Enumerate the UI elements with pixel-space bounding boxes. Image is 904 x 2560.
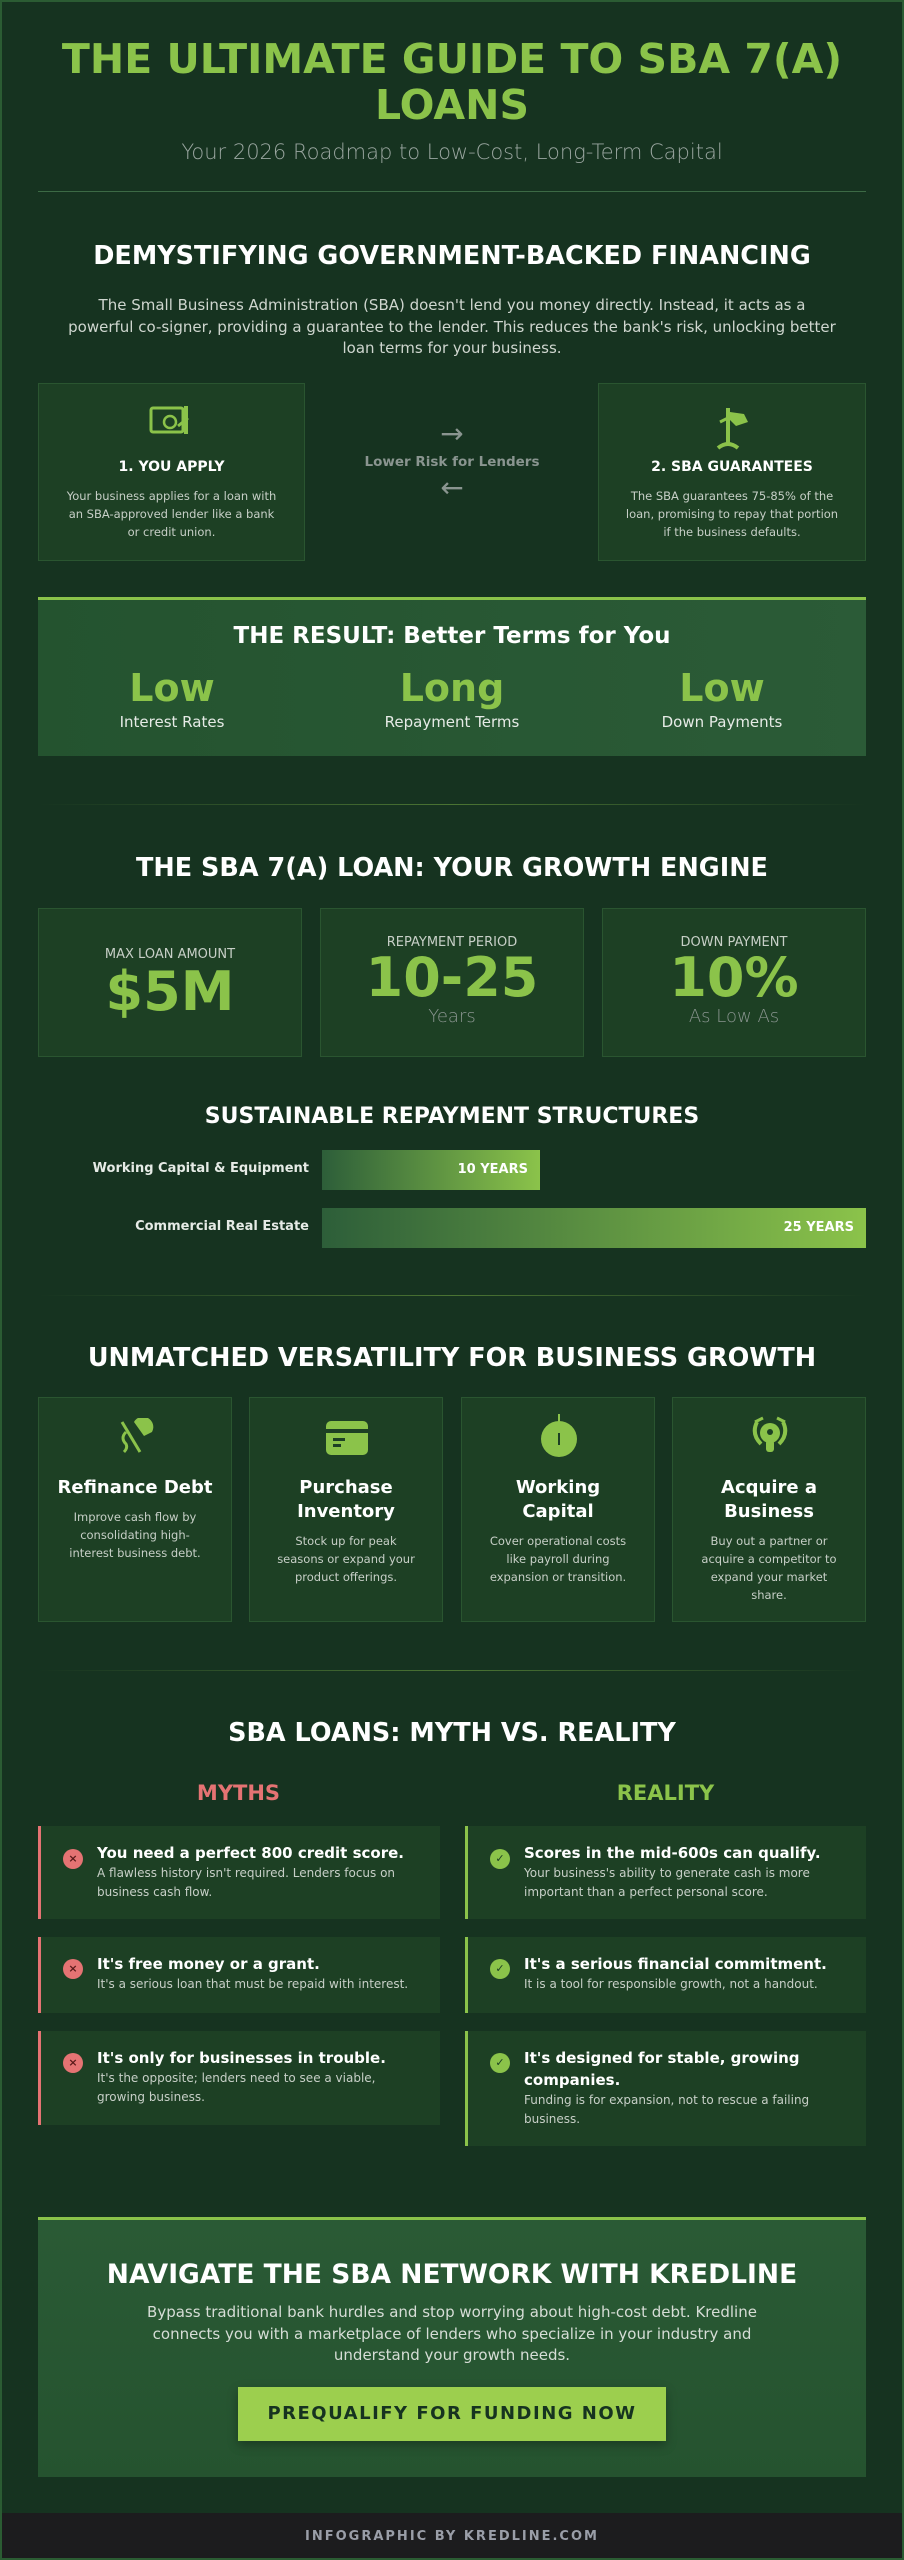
reality 1: ✓ xyxy=(495,1852,505,1865)
myth 2: × xyxy=(68,1962,78,1975)
card: working capital xyxy=(461,1397,655,1622)
reality 2 xyxy=(465,1937,866,2013)
arrows: lower risk xyxy=(364,417,540,504)
myth 1: You need a perfect 800 credit score. xyxy=(97,1844,404,1862)
text: step 2: The SBA guarantees 75-85% of the loan, promising to repay that portion if the business defaults. xyxy=(626,489,838,539)
icon: application xyxy=(150,406,189,434)
card: acquire: Business xyxy=(724,1501,814,1522)
bar: real estate xyxy=(135,1208,866,1248)
subtitle: Your 2026 Roadmap to Low-Cost, Long-Term Capital xyxy=(181,140,723,164)
heading: step 1: 1. YOU APPLY xyxy=(119,459,224,475)
bar: working capital xyxy=(93,1150,540,1190)
reality 2: It is a tool for responsible growth, not a handout. xyxy=(524,1977,818,1991)
stat: low down xyxy=(662,666,782,731)
title: LOANS xyxy=(375,81,529,129)
stat: low interest xyxy=(120,666,224,731)
intro paragraph: powerful co-signer, providing a guarantee to the lender. This reduces the bank's risk, unlocking better loan terms for your business. xyxy=(68,318,836,357)
myth 1: × xyxy=(68,1852,78,1865)
heading: result: THE RESULT: Better Terms for You xyxy=(234,623,670,649)
bar chart: repayment xyxy=(93,1150,866,1248)
reality 1: Your business's ability to generate cash is more important than a perfect personal score. xyxy=(524,1866,810,1899)
reality 3 xyxy=(465,2031,866,2146)
arrows: lower risk: Lower Risk for Lenders xyxy=(364,454,540,470)
stat card: repayment period: Years xyxy=(428,1006,476,1027)
icon: refinance xyxy=(120,1418,154,1453)
heading: versatility: UNMATCHED VERSATILITY FOR BUSINESS GROWTH xyxy=(88,1343,816,1373)
reality 2: ✓ xyxy=(495,1962,505,1975)
arrows: lower risk: → xyxy=(440,417,464,450)
stat card: down payment: 10% xyxy=(669,946,799,1009)
bar: working capital: Working Capital & Equipment xyxy=(93,1161,309,1176)
stat card: max loan: MAX LOAN AMOUNT xyxy=(105,947,235,962)
stat card: down payment: DOWN PAYMENT xyxy=(681,935,787,950)
card: inventory: Purchase xyxy=(299,1477,393,1498)
stat: long terms: Repayment Terms xyxy=(385,713,519,731)
arrows: lower risk: ← xyxy=(440,471,464,504)
heading: myths: MYTHS xyxy=(197,1781,280,1805)
stat card: max loan: $5M xyxy=(106,960,234,1023)
button: prequalify: PREQUALIFY FOR FUNDING NOW xyxy=(267,2403,637,2424)
myth 2: It's a serious loan that must be repaid with interest. xyxy=(97,1977,408,1991)
title: THE ULTIMATE GUIDE TO SBA 7(A) xyxy=(62,35,842,83)
heading: repayment structures: SUSTAINABLE REPAYMENT STRUCTURES xyxy=(205,1104,699,1129)
card: acquire xyxy=(672,1397,866,1622)
heading: step 2: 2. SBA GUARANTEES xyxy=(651,459,813,475)
card: refinance: Refinance Debt xyxy=(58,1477,212,1498)
bar: working capital: 10 YEARS xyxy=(458,1162,528,1177)
stat card: repayment period xyxy=(320,908,584,1057)
icon: flag xyxy=(716,408,748,450)
card: working capital: Cover operational costs like payroll during expansion or transition. xyxy=(490,1534,626,1584)
panel: you apply xyxy=(38,383,305,561)
card: refinance: Improve cash flow by consolidating high-interest business debt. xyxy=(69,1510,201,1560)
text: step 1: Your business applies for a loan with an SBA-approved lender like a bank or credit union. xyxy=(67,489,276,539)
stat card: down payment: As Low As xyxy=(689,1006,779,1027)
card: refinance xyxy=(38,1397,232,1622)
heading: myth vs reality: SBA LOANS: MYTH VS. REALITY xyxy=(228,1718,676,1748)
card: inventory xyxy=(249,1397,443,1622)
reality 1 xyxy=(465,1826,866,1919)
card: working capital: Working xyxy=(516,1477,600,1498)
reality 3: It's designed for stable, growing companies. xyxy=(524,2049,800,2089)
stat card: max loan xyxy=(38,908,302,1057)
myth 3: × xyxy=(68,2056,78,2069)
stat: low interest: Low xyxy=(129,666,215,710)
stat: long terms xyxy=(385,666,519,731)
myth 1: A flawless history isn't required. Lenders focus on business cash flow. xyxy=(97,1866,395,1899)
reality 1: Scores in the mid-600s can qualify. xyxy=(524,1844,821,1862)
reality 3: Funding is for expansion, not to rescue a failing business. xyxy=(524,2093,809,2126)
bar: real estate: Commercial Real Estate xyxy=(135,1219,309,1234)
stat card: down payment xyxy=(602,908,866,1057)
icon: acquire xyxy=(752,1416,788,1452)
card: working capital: Capital xyxy=(522,1501,594,1522)
reality 3: ✓ xyxy=(495,2056,505,2069)
heading: cta: NAVIGATE THE SBA NETWORK WITH KREDLINE xyxy=(107,2259,797,2290)
reality 2: It's a serious financial commitment. xyxy=(524,1955,827,1973)
heading: 7a loan: THE SBA 7(A) LOAN: YOUR GROWTH ENGINE xyxy=(136,853,768,883)
stat card: repayment period: 10-25 xyxy=(366,946,538,1009)
card: acquire: Acquire a xyxy=(721,1477,817,1498)
stat: low interest: Interest Rates xyxy=(120,713,224,731)
card: inventory: Inventory xyxy=(297,1501,395,1522)
myth 2: It's free money or a grant. xyxy=(97,1955,320,1973)
intro paragraph xyxy=(68,296,836,357)
stat card: repayment period: REPAYMENT PERIOD xyxy=(387,935,517,950)
text: cta: Bypass traditional bank hurdles and stop worrying about high-cost debt. Kredline connects you with a marketplace of lenders who specialize in your industry and understand your growth needs. xyxy=(147,2303,757,2364)
myth 3 xyxy=(38,2031,440,2125)
bar: real estate: 25 YEARS xyxy=(784,1220,854,1235)
myth 1 xyxy=(38,1826,440,1919)
panel: sba guarantees xyxy=(598,383,866,561)
title xyxy=(62,35,842,129)
heading: reality: REALITY xyxy=(617,1781,714,1805)
myth 2 xyxy=(38,1937,440,2013)
heading: demystifying: DEMYSTIFYING GOVERNMENT-BACKED FINANCING xyxy=(93,241,811,271)
footer: INFOGRAPHIC BY KREDLINE.COM xyxy=(305,2529,599,2544)
panel: the result xyxy=(38,597,866,756)
button: prequalify xyxy=(238,2387,666,2441)
footer xyxy=(0,2513,904,2560)
card: inventory: Stock up for peak seasons or expand your product offerings. xyxy=(277,1534,415,1584)
stat: low down: Low xyxy=(679,666,765,710)
myth 3: It's only for businesses in trouble. xyxy=(97,2049,386,2067)
stat: long terms: Long xyxy=(400,666,504,710)
intro paragraph: The Small Business Administration (SBA) doesn't lend you money directly. Instead, it acts as a xyxy=(99,296,805,314)
icon: coin xyxy=(541,1414,577,1457)
panel: cta xyxy=(38,2217,866,2477)
stat: low down: Down Payments xyxy=(662,713,782,731)
icon: card xyxy=(326,1421,368,1455)
card: acquire: Buy out a partner or acquire a competitor to expand your market share. xyxy=(701,1534,837,1602)
myth 3: It's the opposite; lenders need to see a viable, growing business. xyxy=(97,2071,376,2104)
